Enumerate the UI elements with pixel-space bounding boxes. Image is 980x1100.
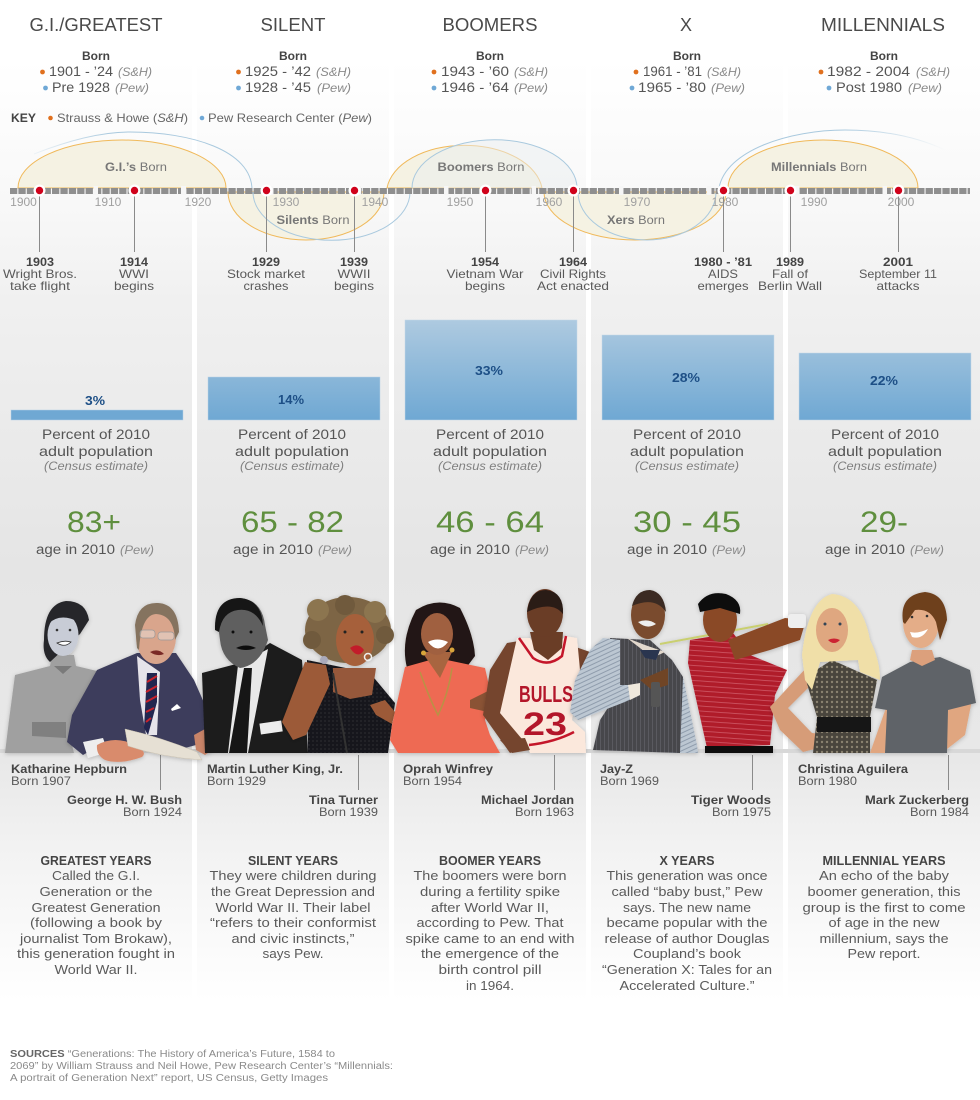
population label: Percent of 2010 [436, 426, 544, 442]
birth years: (S&H) [514, 65, 548, 79]
event 1929: Stock market [227, 267, 306, 281]
arc: Silents born: Silents Born [276, 213, 350, 227]
text block: X YEARS [660, 854, 714, 868]
heading: BOOMERS [442, 15, 538, 35]
bar: 22%: 22% [870, 374, 898, 388]
text block: World War II. Their label [216, 900, 371, 915]
text block: in 1964. [466, 978, 514, 993]
bar: 3% [11, 394, 183, 420]
text block: this generation fought in [17, 946, 175, 961]
birth years [236, 49, 351, 95]
text block: says. The new name [623, 900, 751, 915]
text block [406, 854, 574, 993]
text block: They were children during [210, 868, 376, 883]
event 1954 [446, 184, 524, 293]
sources [10, 1049, 393, 1084]
caption: Zuckerberg: Born 1984 [910, 805, 969, 819]
birth years [40, 49, 152, 95]
photo: Michael Jordan: BULLS [519, 681, 573, 707]
decade labels [10, 195, 915, 209]
birth years: (S&H) [316, 65, 351, 79]
event 1989 [758, 184, 822, 293]
text block: An echo of the baby [819, 868, 950, 883]
sources: SOURCES “Generations: The History of America’s Future, 1584 to [10, 1049, 335, 1060]
population label: adult population [235, 443, 349, 459]
birth years: (S&H) [118, 65, 152, 79]
caption: Zuckerberg [865, 755, 969, 819]
event 1903: 1903 [26, 255, 54, 269]
bar: 3%: 3% [85, 394, 105, 408]
event 1914 [114, 184, 154, 293]
time axis [10, 186, 970, 195]
text block: The boomers were born [414, 868, 566, 883]
text block: BOOMER YEARS [439, 854, 541, 868]
birth years: Born [279, 49, 307, 63]
bar: 33% [405, 320, 577, 420]
caption: King: Martin Luther King, Jr. [207, 762, 343, 776]
birth years [630, 49, 745, 95]
text block: World War II. [54, 962, 138, 977]
birth years: Born [82, 49, 110, 63]
birth years: Post 1980 [836, 79, 902, 95]
photo baseline band [0, 749, 980, 753]
event 1964: 1964 [559, 255, 587, 269]
event 1964: Act enacted [537, 279, 609, 293]
age range [825, 506, 944, 557]
sources: 2069” by William Strauss and Neil Howe, Pew Research Center’s “Millennials: [10, 1061, 393, 1072]
text block: group is the first to come [802, 900, 966, 915]
event 1964 [537, 184, 609, 293]
text block: “Generation X: Tales for an [602, 962, 772, 977]
text block: “refers to their conformist [210, 915, 376, 930]
text block: spike came to an end with [406, 931, 574, 946]
birth years [819, 49, 950, 95]
caption: Winfrey [403, 762, 493, 788]
text block: journalist Tom Brokaw), [19, 931, 172, 946]
birth years: 1946 - ’64 [441, 79, 509, 95]
text block: Generation or the [40, 884, 152, 899]
decade labels: 1900 [10, 195, 37, 209]
caption: Aguilera: Born 1980 [798, 774, 857, 788]
bar: 28%: 28% [672, 371, 700, 385]
text block: during a fertility spike [420, 884, 560, 899]
age range: age in 2010 [233, 542, 313, 557]
birth years: (S&H) [916, 65, 950, 79]
event 1914: 1914 [120, 255, 148, 269]
decade labels: 1950 [447, 195, 474, 209]
photo: Jay-Z [570, 590, 698, 753]
decade labels: 1990 [801, 195, 828, 209]
photo: Tiger Woods [660, 593, 806, 753]
timeline [3, 130, 970, 293]
event 1989: Fall of [772, 267, 809, 281]
population label: Percent of 2010 [633, 426, 741, 442]
population label [433, 426, 547, 473]
text block: This generation was once [606, 868, 768, 883]
event 1939 [334, 184, 374, 293]
birth years [432, 49, 548, 95]
age range: 65 - 82 [241, 506, 344, 539]
birth years: Pre 1928 [52, 79, 110, 95]
heading: MILLENNIALS [821, 15, 945, 35]
birth years: (Pew) [317, 81, 351, 95]
text block: Greatest Generation [32, 900, 160, 915]
event 1914: begins [114, 279, 154, 293]
decade labels: 1920 [185, 195, 212, 209]
age range: age in 2010 [36, 542, 115, 557]
event 1954: begins [465, 279, 505, 293]
text block: boomer generation, this [808, 884, 961, 899]
photo: Michael Jordan [483, 589, 590, 753]
text block: Called the G.I. [52, 868, 140, 883]
birth years: 1943 - ’60 [441, 63, 509, 79]
caption: Turner [309, 755, 378, 819]
decade labels: 1970 [624, 195, 651, 209]
birth years: 1925 - ’42 [245, 63, 311, 79]
arc: Millennials born: Millennials Born [771, 160, 867, 174]
age range: 29- [860, 506, 908, 539]
birth years: 1965 - ’80 [638, 79, 706, 95]
photo: Christina Aguilera [770, 594, 880, 753]
birth years: (Pew) [115, 81, 149, 95]
event 1980-81 [694, 184, 752, 293]
text block: and civic instincts,” [232, 931, 354, 946]
decade labels: 1960 [536, 195, 563, 209]
population label: adult population [630, 443, 744, 459]
event 2001: attacks [876, 279, 920, 293]
text block: after World War II, [431, 900, 549, 915]
caption: Winfrey: Born 1954 [403, 774, 462, 788]
caption: Winfrey: Oprah Winfrey [403, 762, 493, 776]
caption: Bush: Born 1924 [123, 805, 182, 819]
arc: Boomers born [387, 140, 577, 188]
population label [39, 426, 153, 473]
heading: X [680, 15, 692, 35]
text block [802, 854, 966, 961]
event 1939: 1939 [340, 255, 368, 269]
caption: Hepburn [11, 762, 127, 788]
bar: 14% [208, 377, 380, 420]
panel: Silent [207, 15, 380, 961]
event 1980-81: AIDS [708, 267, 738, 281]
event 1903: take flight [10, 279, 71, 293]
age range: age in 2010 [430, 542, 510, 557]
event 1903 [3, 184, 77, 293]
panel: Millennials [798, 15, 971, 961]
population label [630, 426, 744, 473]
bar: 14%: 14% [278, 393, 304, 407]
population label: (Census estimate) [438, 461, 542, 473]
decade labels: 1910 [95, 195, 122, 209]
text block: of age in the new [828, 915, 940, 930]
population label: Percent of 2010 [238, 426, 346, 442]
age range: (Pew) [120, 543, 154, 557]
key legend: Pew Research Center ( Pew) [208, 111, 372, 125]
panel: G.I./Greatest [11, 15, 183, 977]
event 1929: crashes [244, 279, 288, 293]
event 1954: 1954 [471, 255, 499, 269]
key legend: Strauss & Howe ( S&H) [57, 111, 188, 125]
text block: according to Pew. That [416, 915, 564, 930]
text block: release of author Douglas [604, 931, 770, 946]
population label: (Census estimate) [240, 461, 344, 473]
birth years: 1901 - ’24 [49, 63, 113, 79]
text block: SILENT YEARS [248, 854, 338, 868]
caption: Aguilera: Christina Aguilera [798, 762, 908, 776]
caption: Turner: Born 1939 [319, 805, 378, 819]
age range [36, 506, 154, 557]
text block [602, 854, 772, 993]
birth years: (Pew) [514, 81, 548, 95]
birth years: (S&H) [707, 65, 741, 79]
population label: Percent of 2010 [831, 426, 939, 442]
event 2001: 2001 [883, 255, 913, 269]
text block: Pew report. [848, 946, 920, 961]
age range: 46 - 64 [436, 506, 544, 539]
bar: 33%: 33% [475, 364, 503, 378]
heading: G.I./GREATEST [30, 15, 162, 35]
population label [828, 426, 942, 473]
caption: Jay-Z: Born 1969 [600, 774, 659, 788]
text block: Coupland’s book [633, 946, 742, 961]
population label: adult population [39, 443, 153, 459]
population label: (Census estimate) [44, 461, 148, 473]
age range: (Pew) [515, 543, 549, 557]
photo: Mark Zuckerberg [870, 592, 976, 753]
event 1980-81: 1980 - ’81 [694, 255, 752, 269]
text block: (following a book by [30, 915, 163, 930]
heading: SILENT [260, 15, 326, 35]
caption: Aguilera [798, 762, 908, 788]
caption: Woods: Born 1975 [712, 805, 771, 819]
event 1929 [227, 184, 306, 293]
event 1980-81: emerges [698, 279, 748, 293]
decade labels: 1930 [273, 195, 300, 209]
birth years: Born [870, 49, 898, 63]
population label: (Census estimate) [635, 461, 739, 473]
birth years: (Pew) [908, 81, 942, 95]
birth years: Born [673, 49, 701, 63]
birth years: 1982 - 2004 [827, 63, 910, 79]
age range: age in 2010 [825, 542, 905, 557]
text block: birth control pill [438, 962, 542, 977]
photo: Martin Luther King Jr. [202, 598, 308, 753]
caption: Hepburn: Katharine Hepburn [11, 762, 127, 776]
caption: Jay-Z: Jay-Z [600, 762, 633, 776]
population label: adult population [828, 443, 942, 459]
panel: X [600, 15, 774, 993]
birth years: 1928 - ’45 [245, 79, 311, 95]
age range: age in 2010 [627, 542, 707, 557]
text block: the Great Depression and [211, 884, 375, 899]
event 2001 [859, 184, 937, 293]
caption: Woods [691, 755, 771, 819]
age range [233, 506, 352, 557]
population label: (Census estimate) [833, 461, 937, 473]
event 1914: WWI [119, 267, 149, 281]
caption: Woods: Tiger Woods [691, 793, 771, 807]
decade labels: 1940 [362, 195, 389, 209]
photo: Oprah Winfrey [390, 602, 500, 753]
caption: Jordan [481, 755, 574, 819]
age range: (Pew) [910, 543, 944, 557]
arc: Xers born [544, 192, 726, 240]
event 1964: Civil Rights [540, 267, 606, 281]
key legend [11, 111, 372, 125]
text block: says Pew. [262, 946, 324, 961]
arc: G.I.s born: G.I.’s Born [105, 160, 167, 174]
text block: called “baby bust,” Pew [612, 884, 763, 899]
event 1989: Berlin Wall [758, 279, 822, 293]
population label: adult population [433, 443, 547, 459]
caption: Jay-Z [600, 762, 659, 788]
birth years: (Pew) [711, 81, 745, 95]
text block: MILLENNIAL YEARS [822, 854, 946, 868]
age range [430, 506, 549, 557]
photo: George H. W. Bush [67, 603, 225, 762]
photo: Tina Turner [282, 595, 395, 753]
sources: A portrait of Generation Next” report, US Census, Getty Images [10, 1073, 328, 1084]
event 1939: WWII [338, 267, 370, 281]
caption: Bush: George H. W. Bush [67, 793, 182, 807]
caption: Hepburn: Born 1907 [11, 774, 71, 788]
text block: GREATEST YEARS [40, 854, 152, 868]
key legend: KEY [11, 111, 36, 125]
birth years: Born [476, 49, 504, 63]
caption: King: Born 1929 [207, 774, 266, 788]
text block [17, 854, 175, 977]
caption: Jordan: Born 1963 [515, 805, 574, 819]
text block [210, 854, 376, 961]
event 1954: Vietnam War [446, 267, 524, 281]
caption: Bush [67, 755, 182, 819]
text block: millennium, says the [820, 931, 948, 946]
age range: 30 - 45 [633, 506, 741, 539]
photo: Michael Jordan: 23 [523, 706, 567, 742]
text block: Accelerated Culture.” [620, 978, 754, 993]
caption: Jordan: Michael Jordan [481, 793, 574, 807]
text block: became popular with the [606, 915, 768, 930]
photo: Katharine Hepburn [5, 601, 100, 753]
age range: (Pew) [712, 543, 746, 557]
population label: Percent of 2010 [42, 426, 150, 442]
event 1903: Wright Bros. [3, 267, 77, 281]
age range [627, 506, 746, 557]
bar: 28% [602, 335, 774, 420]
age range: 83+ [67, 506, 121, 539]
arc: Boomers born: Boomers Born [438, 160, 524, 174]
event 1929: 1929 [252, 255, 280, 269]
event 2001: September 11 [859, 267, 937, 281]
panel: Boomers [403, 15, 577, 993]
birth years: 1961 - ’81 [643, 63, 702, 79]
decade labels: 2000 [888, 195, 915, 209]
caption: Turner: Tina Turner [309, 793, 378, 807]
arc: G.I.s born [18, 132, 252, 190]
event 1989: 1989 [776, 255, 804, 269]
arc: Silents born [228, 192, 410, 240]
decade labels: 1980 [712, 195, 739, 209]
bar: 22% [799, 353, 971, 420]
text block: the emergence of the [421, 946, 559, 961]
caption: Zuckerberg: Mark Zuckerberg [865, 793, 969, 807]
age range: (Pew) [318, 543, 352, 557]
caption: King [207, 762, 343, 788]
population label [235, 426, 349, 473]
arc: Millennials born [719, 130, 945, 188]
event 1939: begins [334, 279, 374, 293]
arc: Xers born: Xers Born [607, 213, 665, 227]
